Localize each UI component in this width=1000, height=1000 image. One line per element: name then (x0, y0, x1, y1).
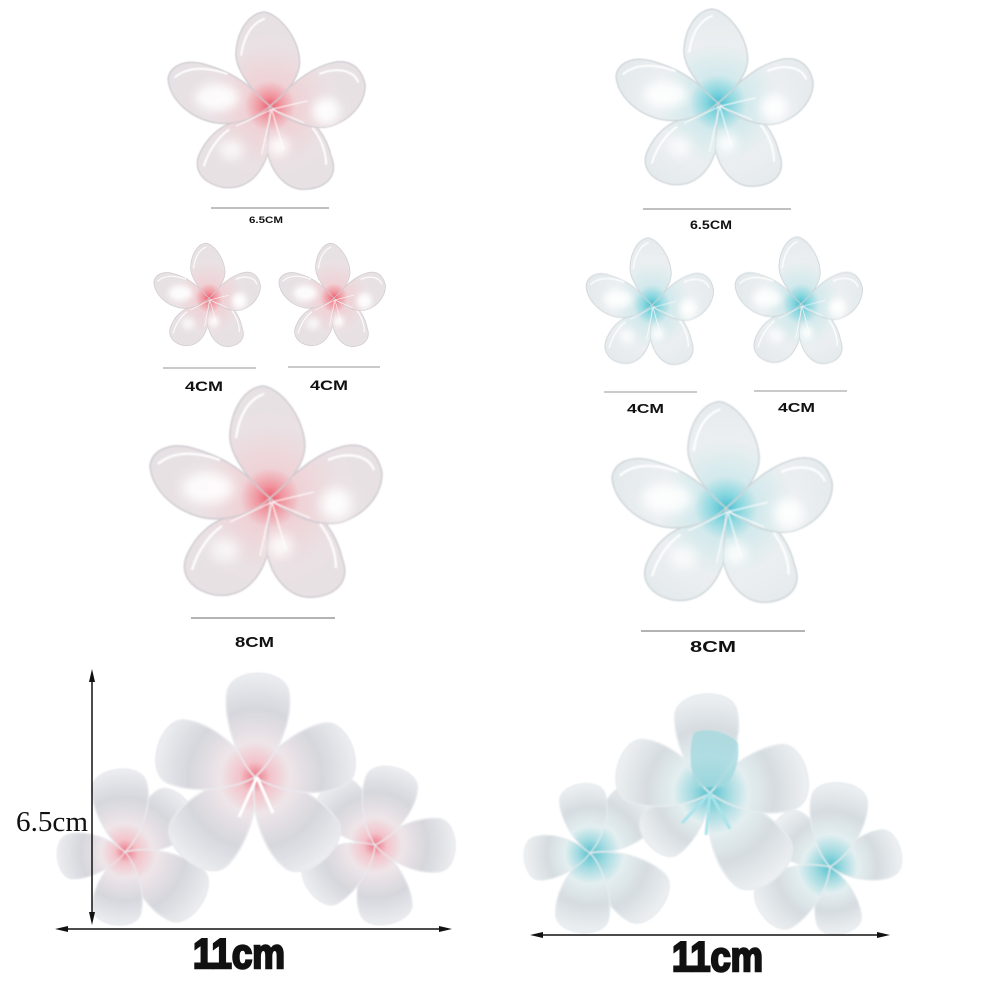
pink 8cm measurement: 8CM (235, 634, 274, 651)
pink 4cm measurement left (163, 368, 256, 394)
pink claw left flower (55, 767, 218, 931)
blue flower 8cm (612, 402, 832, 602)
pink 6.5cm measurement: 6.5CM (249, 215, 283, 225)
pink flower 6.5cm (168, 12, 365, 189)
pink claw right flower (294, 761, 455, 929)
blue triple-flower claw (522, 692, 906, 938)
blue claw centre flower (609, 692, 814, 901)
blue 4cm measurement left (604, 392, 697, 416)
blue claw width label: 11cm (672, 933, 763, 980)
blue flower 4cm right (735, 237, 863, 364)
pink claw centre flower (148, 672, 362, 883)
pink flower 4cm right (279, 243, 386, 347)
pink 4cm measurement right (288, 367, 380, 393)
blue 4cm measurement right: 4CM (778, 400, 815, 415)
pink claw width label: 11cm (193, 930, 285, 977)
pink claw vertical arrow (89, 669, 95, 925)
blue 4cm measurement right (754, 391, 847, 415)
blue 8cm measurement: 8CM (690, 639, 736, 656)
blue claw right flower (746, 779, 906, 938)
blue flower 4cm left (586, 238, 714, 365)
blue 6.5cm measurement: 6.5CM (690, 218, 732, 232)
blue flower 6.5cm (616, 9, 813, 186)
pink 6.5cm measurement (211, 208, 329, 225)
pink 4cm measurement right: 4CM (310, 377, 348, 393)
pink triple-flower claw (55, 672, 455, 931)
blue 4cm measurement left: 4CM (627, 401, 664, 416)
pink 4cm measurement left: 4CM (185, 378, 223, 394)
blue claw horizontal arrow (530, 932, 890, 938)
pink claw height label: 6.5cm (16, 807, 88, 838)
blue claw left flower (522, 777, 679, 936)
pink claw horizontal arrow (55, 926, 452, 932)
pink flower 4cm left (154, 243, 261, 347)
pink flower 8cm (150, 386, 382, 597)
